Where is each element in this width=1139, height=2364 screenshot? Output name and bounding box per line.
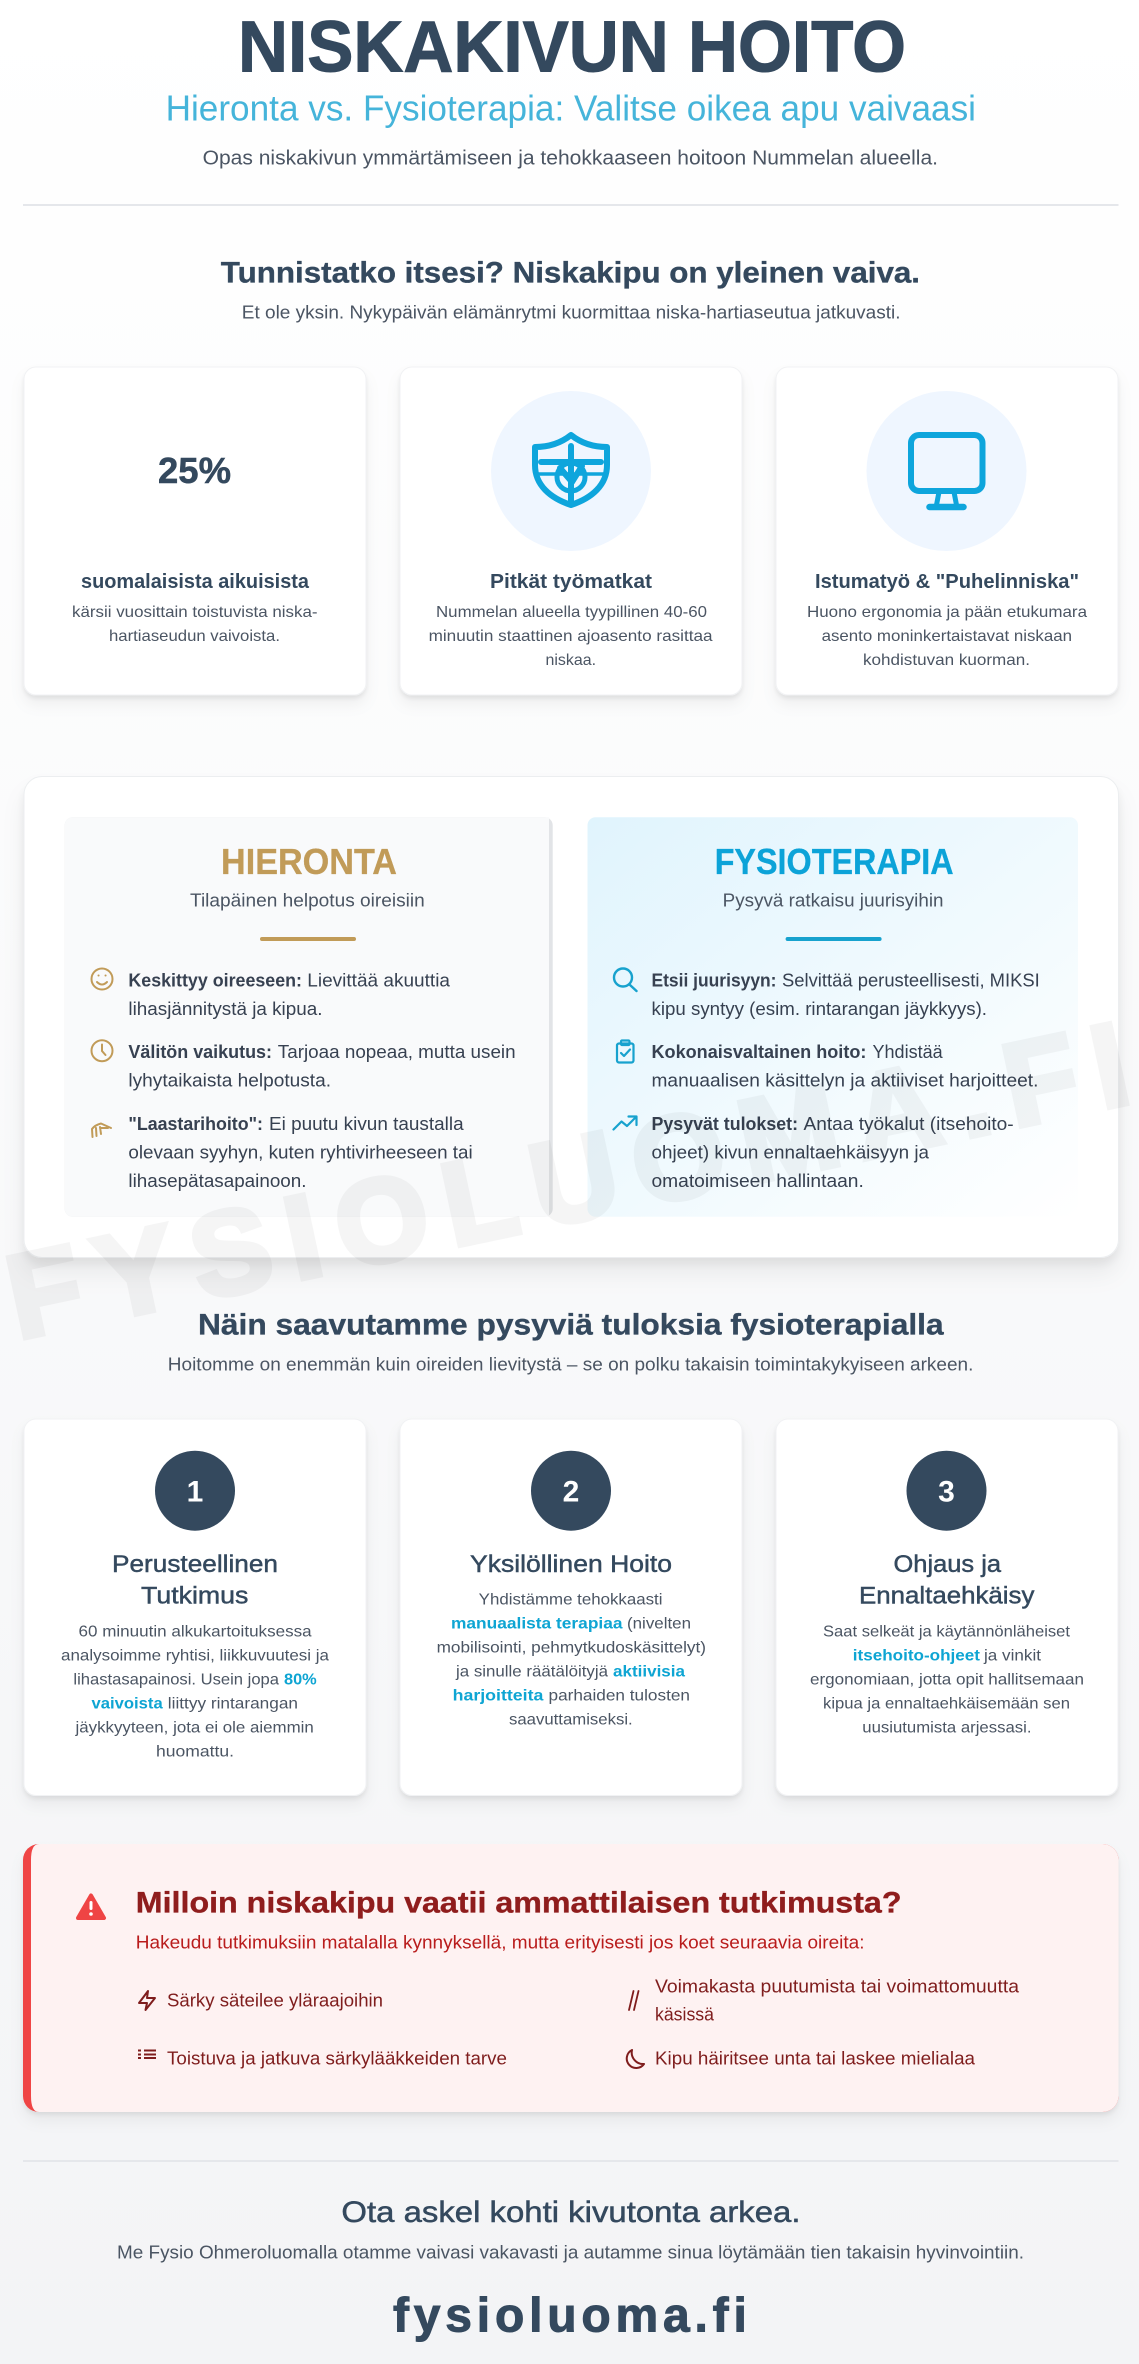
card text: Nummelan alueella tyypillinen 40-60 — [436, 604, 707, 621]
section intro: Hoitomme on enemmän kuin oireiden lievitystä – se on polku takaisin toimintakykyiseen arkeen. — [168, 1355, 973, 1375]
icon: clipboard — [617, 1040, 634, 1062]
step number — [906, 1451, 986, 1531]
step text: 80% — [284, 1672, 317, 1688]
icon: warning triangle — [78, 1896, 104, 1918]
card text: asento moninkertaistavat niskaan — [822, 628, 1072, 645]
footer text: Me Fysio Ohmeroluomalla otamme vaivasi vakavasti ja autamme sinua löytämään tien takaisin hyvinvointiin. — [117, 2243, 1024, 2263]
list item: symptom focus: lihasjännitystä ja kipua. — [128, 999, 322, 1019]
step heading: Ennaltaehkäisy — [859, 1583, 1034, 1610]
list item: band-aid treatment: olevaan syyhyn, kuten ryhtivirheeseen tai — [128, 1142, 473, 1162]
icon: shield — [491, 391, 651, 551]
step text: 60 minuutin alkukartoituksessa — [78, 1624, 312, 1640]
section heading: lasting results: Näin saavutamme pysyviä tuloksia fysioterapialla — [198, 1308, 944, 1341]
icon: trending up — [614, 1116, 636, 1130]
step text: itsehoito-ohjeet — [853, 1648, 981, 1664]
step text: huomattu. — [156, 1744, 234, 1760]
card heading: Pitkät työmatkat — [490, 571, 652, 593]
step number — [531, 1451, 611, 1531]
step heading: Ohjaus ja — [894, 1551, 1002, 1578]
section heading: recognise yourself: Tunnistatko itsesi? Niskakipu on yleinen vaiva. — [221, 257, 920, 290]
card text — [807, 604, 1087, 669]
warning intro: Hakeudu tutkimuksiin matalalla kynnyksellä, mutta erityisesti jos koet seuraavia oireita: — [136, 1932, 865, 1952]
title: NISKAKIVUN HOITO — [238, 8, 906, 88]
brand: fysioluoma.fi — [393, 2289, 747, 2342]
step text: ja vinkit — [983, 1648, 1042, 1664]
step text: parhaiden tulosten — [548, 1688, 690, 1704]
symptom: sleep: Kipu häiritsee unta tai laskee mielialaa — [655, 2048, 976, 2068]
symptom: radiating pain: Särky säteilee yläraajoihin — [167, 1991, 383, 2011]
list item: holistic care — [617, 1040, 1038, 1091]
step text: vaivoista — [92, 1696, 163, 1712]
list item: holistic care: Kokonaisvaltainen hoito: — [652, 1042, 866, 1062]
step number: 3 — [938, 1475, 955, 1508]
step text: harjoitteita — [453, 1688, 544, 1704]
list item: symptom focus: Lievittää akuuttia — [307, 971, 451, 991]
symptom: numbness: käsissä — [655, 2005, 715, 2025]
step text: ergonomiaan, jotta opit hallitsemaan — [810, 1672, 1084, 1688]
card text: minuutin staattinen ajoasento rasittaa — [429, 628, 713, 645]
panel: step 2 — [400, 1419, 742, 1796]
step text: jäykkyyteen, jota ei ole aiemmin — [74, 1720, 314, 1736]
step text — [810, 1624, 1084, 1736]
header — [166, 8, 976, 170]
watermark: FYSIOLUOMA.FI — [0, 998, 1139, 1364]
card heading: Istumatyö & "Puhelinniska" — [815, 571, 1079, 593]
tagline: Opas niskakivun ymmärtämiseen ja tehokkaaseen hoitoon Nummelan alueella. — [203, 148, 938, 170]
step heading: Tutkimus — [141, 1583, 248, 1610]
list item: root cause: Etsii juurisyyn: — [652, 971, 776, 991]
list item: lasting results: ohjeet) kivun ennaltaehkäisyyn ja — [652, 1142, 930, 1162]
step text: manuaalista terapiaa — [451, 1616, 623, 1632]
icon: smile — [92, 968, 112, 990]
step heading — [859, 1551, 1034, 1610]
list item: lasting results: omatoimiseen hallintaan. — [652, 1171, 864, 1191]
subtitle: Hieronta vs. Fysioterapia: Valitse oikea apu vaivaasi — [166, 88, 976, 129]
icon: monitor — [866, 391, 1026, 551]
warning heading: Milloin niskakipu vaatii ammattilaisen tutkimusta? — [136, 1886, 902, 1919]
list item: symptom focus — [92, 968, 451, 1019]
panel: comparison — [24, 776, 1118, 1258]
panel: step 1 — [24, 1419, 366, 1796]
card text — [429, 604, 713, 669]
step heading — [112, 1551, 278, 1610]
list item: immediate effect: lyhytaikaista helpotusta. — [128, 1071, 331, 1091]
card text: niskaa. — [546, 652, 596, 669]
list item: immediate effect: Tarjoaa nopeaa, mutta usein — [278, 1042, 516, 1062]
column subtitle: Pysyvä ratkaisu juurisyihin — [723, 891, 944, 911]
icon: moon — [627, 2050, 644, 2068]
icon: lightning — [139, 1991, 155, 2010]
list item: band-aid treatment: Ei puutu kivun taustalla — [269, 1114, 465, 1134]
list item: lasting results: Antaa työkalut (itsehoito- — [804, 1114, 1014, 1134]
symptom: painkillers: Toistuva ja jatkuva särkylääkkeiden tarve — [167, 2048, 507, 2068]
list item: immediate effect — [92, 1040, 516, 1091]
step text: (nivelten — [627, 1616, 691, 1632]
list item: lasting results — [614, 1114, 1014, 1191]
list item: band-aid treatment — [92, 1114, 473, 1191]
list item: band-aid treatment: "Laastarihoito": — [128, 1114, 263, 1134]
column subtitle: Tilapäinen helpotus oireisiin — [190, 891, 425, 911]
card text: Huono ergonomia ja pään etukumara — [807, 604, 1087, 621]
column heading: FYSIOTERAPIA — [715, 841, 954, 882]
list item: root cause: Selvittää perusteellisesti, MIKSI — [782, 971, 1040, 991]
card heading: suomalaisista aikuisista — [81, 571, 310, 593]
step text — [61, 1624, 329, 1760]
step text: analysoimme ryhtisi, liikkuvuutesi ja — [61, 1648, 329, 1664]
card text — [72, 604, 318, 645]
column heading: HIERONTA — [221, 841, 397, 882]
list item: lasting results: Pysyvät tulokset: — [652, 1114, 798, 1134]
panel: hieronta column — [65, 817, 553, 1217]
step number: 1 — [187, 1475, 203, 1508]
card text: kohdistuvan kuorman. — [863, 652, 1030, 669]
statistic: 25% — [158, 450, 231, 491]
step text — [437, 1592, 706, 1728]
list item: symptom focus: Keskittyy oireeseen: — [128, 971, 302, 991]
list item: holistic care: manuaalisen käsittelyn ja aktiiviset harjoitteet. — [652, 1071, 1038, 1091]
list item: root cause — [614, 968, 1040, 1019]
list item: root cause: kipu syntyy (esim. rintarangan jäykkyys). — [652, 999, 987, 1019]
step text: liittyy rintarangan — [168, 1696, 298, 1712]
panel: fysioterapia column — [588, 817, 1078, 1217]
step heading: Yksilöllinen Hoito — [470, 1551, 672, 1578]
step text: Saat selkeät ja käytännönläheiset — [823, 1624, 1071, 1640]
step text: aktiivisia — [613, 1664, 685, 1680]
icon: slashes — [629, 1991, 638, 2010]
step number: 2 — [563, 1475, 579, 1508]
icon: list — [138, 2050, 156, 2058]
call to action: Ota askel kohti kivutonta arkea. — [341, 2196, 800, 2229]
step heading: Perusteellinen — [112, 1551, 278, 1578]
footer — [117, 2196, 1024, 2342]
step text: Yhdistämme tehokkaasti — [479, 1592, 662, 1608]
panel: commute card — [400, 367, 742, 695]
symptom: numbness: Voimakasta puutumista tai voimattomuutta — [655, 1976, 1020, 1996]
step text: lihastasapainosi. Usein jopa — [73, 1672, 279, 1688]
panel: warning — [23, 1844, 1118, 2112]
icon: clock — [92, 1040, 112, 1061]
panel: step 3 — [776, 1419, 1118, 1796]
card text: kärsii vuosittain toistuvista niska- — [72, 604, 318, 621]
step text: saavuttamiseksi. — [509, 1712, 633, 1728]
icon: search — [614, 968, 636, 991]
step text: mobilisointi, pehmytkudoskäsittelyt) — [437, 1640, 706, 1656]
step text: ja sinulle räätälöityjä — [455, 1664, 608, 1680]
step text: uusiutumista arjessasi. — [862, 1720, 1032, 1736]
card text: hartiaseudun vaivoista. — [109, 628, 280, 645]
panel: desk work card — [776, 367, 1118, 695]
list item: holistic care: Yhdistää — [872, 1042, 944, 1062]
list item: band-aid treatment: lihasepätasapainoon. — [128, 1171, 306, 1191]
icon: hand — [92, 1124, 111, 1137]
symptom: numbness — [629, 1976, 1020, 2025]
panel: statistic card — [24, 367, 366, 695]
step text: kipua ja ennaltaehkäisemään sen — [823, 1696, 1070, 1712]
section intro: Et ole yksin. Nykypäivän elämänrytmi kuormittaa niska-hartiaseutua jatkuvasti. — [242, 303, 901, 323]
list item: immediate effect: Välitön vaikutus: — [128, 1042, 272, 1062]
step number — [155, 1451, 235, 1531]
